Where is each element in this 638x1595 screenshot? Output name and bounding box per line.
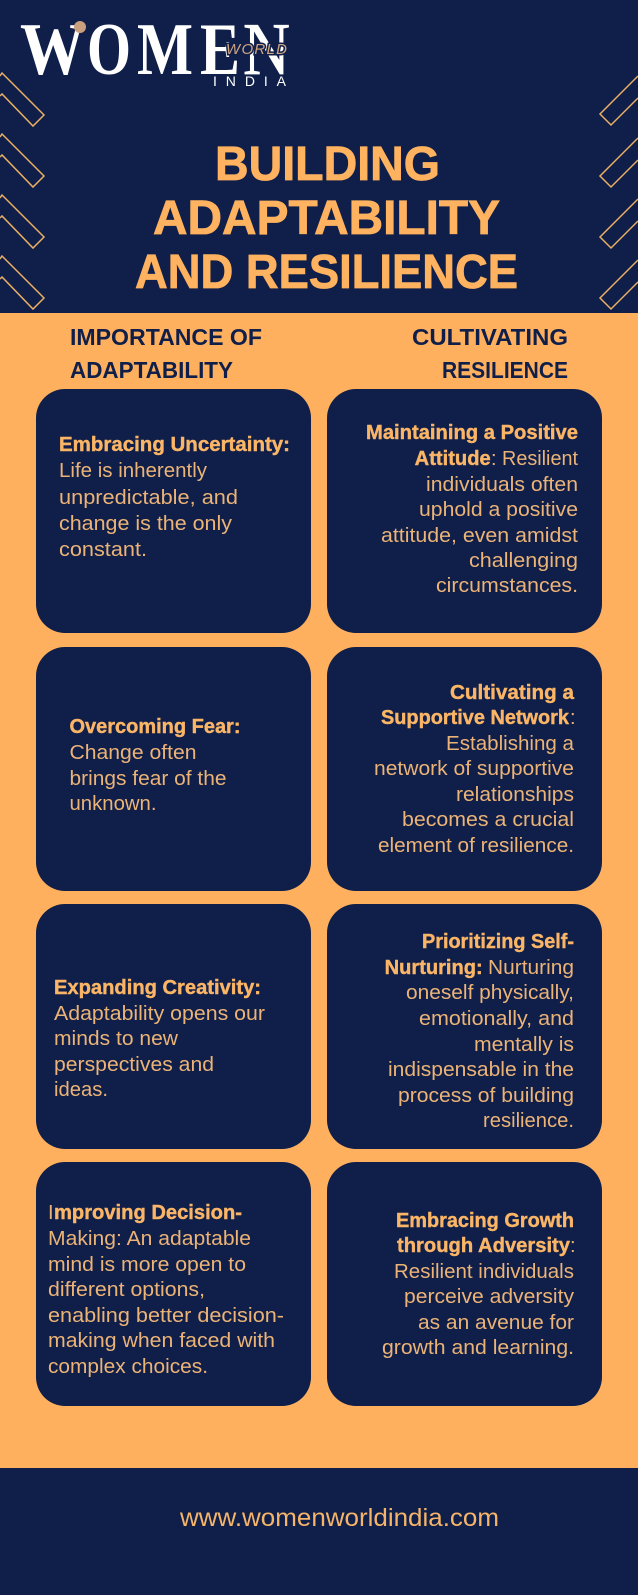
- card: maintaining a positive attitude: : Resilient: [491, 448, 578, 470]
- card: embracing uncertainty: constant.: [59, 539, 147, 561]
- card: overcoming fear: Change often: [70, 742, 196, 764]
- card: embracing growth through adversity: Embracing Growth: [396, 1210, 574, 1232]
- card: maintaining a positive attitude: attitude, even amidst: [381, 525, 578, 547]
- footer website url: www.womenworldindia.com: [179, 1504, 499, 1532]
- card: cultivating a supportive network: relationships: [456, 784, 574, 806]
- logo: Women World India: [20, 9, 290, 91]
- card: embracing uncertainty: change is the only: [59, 513, 232, 535]
- card: improving decision-making: different options,: [48, 1279, 205, 1301]
- card: improving decision-making: complex choices.: [48, 1356, 208, 1378]
- card: improving decision-making: enabling better decision-: [48, 1305, 284, 1327]
- card: maintaining a positive attitude: challenging: [469, 550, 578, 572]
- card: embracing growth through adversity: :: [570, 1235, 576, 1257]
- card: overcoming fear: unknown.: [70, 793, 156, 815]
- card: prioritizing self-nurturing: Nurturing: [488, 957, 574, 979]
- card: embracing uncertainty: unpredictable, and: [59, 487, 238, 509]
- decorative chevrons: left: [0, 73, 44, 309]
- card: improving decision-making: Making: An adaptable: [48, 1228, 251, 1250]
- card: prioritizing self-nurturing: process of building: [398, 1085, 574, 1107]
- card: embracing growth through adversity: Resilient individuals: [394, 1261, 574, 1283]
- logo: Women World India: W: [20, 9, 85, 91]
- card: expanding creativity: perspectives and: [54, 1054, 214, 1076]
- title: BUILDING: [215, 138, 440, 191]
- logo: Women World India: N: [243, 9, 290, 91]
- logo: Women World India: INDIA: [213, 73, 287, 89]
- card: maintaining a positive attitude: [327, 389, 602, 633]
- card: maintaining a positive attitude: individuals often: [426, 474, 578, 496]
- card: prioritizing self-nurturing: Nurturing:: [385, 957, 483, 979]
- card: expanding creativity: [36, 904, 311, 1149]
- column heading: cultivating resilience: RESILIENCE: [442, 357, 568, 383]
- column heading: importance of adaptability: ADAPTABILITY: [70, 357, 233, 383]
- column heading: importance of adaptability: [70, 324, 262, 383]
- card: expanding creativity: minds to new: [54, 1028, 179, 1050]
- card: embracing uncertainty: [36, 389, 311, 633]
- title: ADAPTABILITY: [153, 192, 500, 245]
- title: [135, 138, 518, 299]
- card: embracing growth through adversity: through Adversity: [397, 1235, 571, 1257]
- card: embracing growth through adversity: [327, 1162, 602, 1406]
- card: maintaining a positive attitude: Maintaining a Positive: [366, 422, 578, 444]
- card: cultivating a supportive network: Establishing a: [446, 733, 575, 755]
- card: overcoming fear: [36, 647, 311, 891]
- card: prioritizing self-nurturing: emotionally, and: [419, 1008, 574, 1030]
- card: embracing growth through adversity: growth and learning.: [382, 1337, 574, 1359]
- card: cultivating a supportive network: becomes a crucial: [402, 809, 574, 831]
- card: cultivating a supportive network: Cultivating a: [450, 682, 575, 704]
- footer band: [0, 1468, 638, 1595]
- card: improving decision-making: I: [48, 1202, 54, 1224]
- decorative chevrons: right: [600, 76, 638, 309]
- card: cultivating a supportive network: [327, 647, 602, 891]
- card: maintaining a positive attitude: circumstances.: [436, 575, 578, 597]
- card: overcoming fear: brings fear of the: [70, 768, 226, 790]
- card: cultivating a supportive network: :: [570, 707, 576, 729]
- card: improving decision-making: [36, 1162, 311, 1406]
- card: prioritizing self-nurturing: resilience.: [483, 1110, 574, 1132]
- card: expanding creativity: ideas.: [54, 1079, 108, 1101]
- card: embracing growth through adversity: perceive adversity: [404, 1286, 574, 1308]
- header band: [0, 0, 638, 313]
- card: cultivating a supportive network: element of resilience.: [378, 835, 574, 857]
- column heading: cultivating resilience: CULTIVATING: [412, 324, 568, 350]
- column heading: importance of adaptability: IMPORTANCE OF: [70, 324, 262, 350]
- card: embracing growth through adversity: as an avenue for: [418, 1312, 574, 1334]
- card: embracing uncertainty: Embracing Uncertainty:: [59, 434, 290, 456]
- card: prioritizing self-nurturing: oneself physically,: [406, 982, 574, 1004]
- card: expanding creativity: Expanding Creativity:: [54, 977, 261, 999]
- logo: Women World India: WORLD: [226, 41, 287, 58]
- card: embracing uncertainty: Life is inherently: [59, 460, 207, 482]
- logo: Women World India: M: [137, 9, 193, 91]
- logo: Women World India: O: [87, 9, 131, 91]
- column heading: cultivating resilience: [412, 324, 568, 383]
- card: overcoming fear: Overcoming Fear:: [70, 716, 240, 738]
- card: prioritizing self-nurturing: [327, 904, 602, 1149]
- logo: Women World India: E: [200, 9, 240, 91]
- card: cultivating a supportive network: Supportive Network: [381, 707, 570, 729]
- card: expanding creativity: Adaptability opens our: [54, 1003, 265, 1025]
- card: improving decision-making: mproving Decision-: [54, 1202, 242, 1224]
- card: prioritizing self-nurturing: mentally is: [474, 1034, 574, 1056]
- card: maintaining a positive attitude: uphold a positive: [419, 499, 578, 521]
- card: improving decision-making: mind is more open to: [48, 1254, 246, 1276]
- title: AND RESILIENCE: [135, 246, 518, 299]
- card: improving decision-making: making when faced with: [48, 1330, 275, 1352]
- card: maintaining a positive attitude: Attitude: [415, 448, 491, 470]
- card: cultivating a supportive network: network of supportive: [374, 758, 574, 780]
- card: prioritizing self-nurturing: indispensable in the: [388, 1059, 574, 1081]
- card: prioritizing self-nurturing: Prioritizing Self-: [422, 931, 574, 953]
